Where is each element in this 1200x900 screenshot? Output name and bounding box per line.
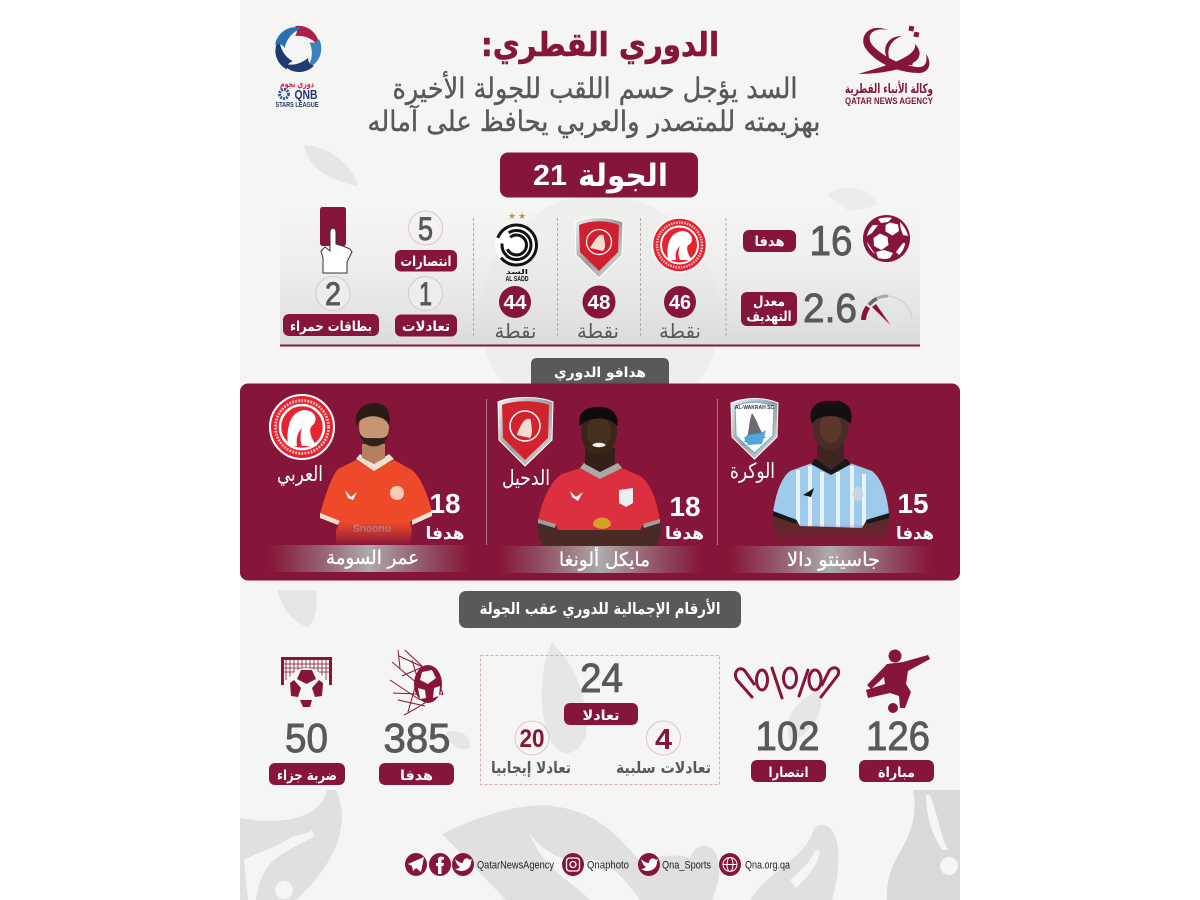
- icon: twitter: [638, 853, 660, 876]
- logo: Al Sadd: ★: [518, 211, 526, 221]
- stat: red cards 2: بطاقات حمراء: [290, 319, 372, 335]
- stat: goals 385: هدفا: [400, 768, 433, 784]
- round badge: 21: [533, 160, 567, 192]
- logo: QNB Stars League: [267, 22, 327, 109]
- logo: Al Sadd: السد: [506, 268, 528, 276]
- panel: league scorers: [240, 384, 960, 580]
- team: Al Sadd: نقطة: [494, 319, 536, 343]
- stat: wins 5: 5: [418, 211, 433, 247]
- footer social links: [405, 853, 791, 876]
- logo: Al Sadd: AL SADD: [506, 276, 528, 283]
- stat: draws 1: 1: [419, 276, 432, 312]
- team: Al Sadd: 44: [504, 292, 527, 314]
- player photo: [316, 403, 436, 546]
- stat: scoring draws: تعادلا إيجابيا: [491, 758, 571, 777]
- stat: goalless draws: تعادلات سلبية: [616, 758, 711, 777]
- scorer: Jacinto Dala: هدفا: [896, 524, 934, 544]
- stat: draws 1: تعادلات: [402, 319, 450, 335]
- icon: facebook: [429, 853, 451, 876]
- player photo: [768, 401, 892, 546]
- title: الدوري القطري:: [481, 25, 719, 65]
- team: Al Duhail: [575, 218, 623, 343]
- subtitle: [368, 70, 820, 138]
- icon: red card in hand: [320, 207, 352, 273]
- stat: goals 385: 385: [384, 715, 450, 761]
- subtitle: بهزيمته للمتصدر والعربي يحافظ على آماله: [368, 105, 820, 138]
- stat: scoring average 2.6: [741, 285, 857, 331]
- scorer: Michael Olunga: [498, 398, 704, 573]
- heading: overall league figures: الأرقام الإجمالية للدوري عقب الجولة: [480, 599, 720, 619]
- logo: Qatar News Agency: QATAR NEWS AGENCY: [845, 96, 933, 106]
- player photo: Snoonu: [353, 523, 391, 535]
- scorer: Omar Al Somah: 18: [430, 488, 460, 519]
- stat: penalties 50: 50: [285, 715, 328, 761]
- logo: Qatar News Agency: وكالة الأنباء القطرية: [845, 80, 933, 97]
- stat: matches 126: 126: [866, 713, 930, 759]
- footer social links: QatarNewsAgency: [477, 860, 554, 872]
- logo: Al Sadd: ★: [508, 211, 516, 221]
- logo: QNB Stars League: QNB: [294, 87, 318, 102]
- scorer: Omar Al Somah: عمر السومة: [326, 547, 419, 569]
- footer social links: Qna_Sports: [662, 860, 711, 872]
- panel: draws breakdown: 24: [580, 655, 623, 701]
- stat: goalless draws: [616, 721, 711, 777]
- stat: goals 16: 16: [810, 217, 852, 264]
- logo: Qatar News Agency: [845, 26, 933, 106]
- stat: goals 385: [379, 650, 454, 785]
- icon: ball in net: [390, 650, 443, 715]
- stat: penalties 50: [269, 657, 345, 785]
- heading: overall league figures: [459, 591, 741, 628]
- stat: wins 102: [735, 668, 839, 782]
- logo: Al Duhail: [575, 218, 623, 278]
- page background: [240, 0, 960, 900]
- team: Al Arabi: [652, 218, 706, 343]
- stat: goals 16: [743, 217, 852, 264]
- logo: Al Wakrah: [731, 398, 778, 459]
- title: [368, 25, 820, 138]
- scorer: Michael Olunga: هدفا: [665, 524, 704, 544]
- scorer: Jacinto Dala: الوكرة: [730, 459, 775, 483]
- logo: Al Sadd: [495, 211, 538, 283]
- logo: Al Arabi: [652, 218, 706, 272]
- logo: QNB Stars League: STARS LEAGUE: [276, 100, 318, 109]
- scorer: Omar Al Somah: هدفا: [426, 524, 464, 544]
- logo: Al Arabi: [270, 395, 334, 459]
- stat: red cards 2: 2: [325, 276, 341, 312]
- team: Al Duhail: نقطة: [577, 319, 619, 343]
- round badge: الجولة: [578, 158, 668, 194]
- stat: wins 5: انتصارات: [400, 254, 452, 270]
- stat: goalless draws: 4: [655, 724, 672, 756]
- scorer: Jacinto Dala: جاسينتو دالا: [787, 549, 880, 571]
- footer social links: Qnaphoto: [587, 860, 629, 872]
- icon: ball in goal: [281, 657, 332, 708]
- stat: red cards 2: [283, 276, 379, 336]
- logo: Al Duhail: [498, 398, 553, 466]
- scorer: Jacinto Dala: 15: [898, 488, 928, 519]
- stat: wins 102: انتصارا: [768, 765, 808, 781]
- stat: wins 5: [395, 211, 457, 272]
- icon: victory chain: [735, 668, 839, 698]
- heading: league scorers: [531, 358, 669, 384]
- scorer: Omar Al Somah: [268, 395, 470, 572]
- stat: scoring draws: [491, 721, 571, 777]
- scorer: Jacinto Dala: [729, 398, 934, 573]
- watermark ornaments: [240, 145, 960, 900]
- footer social links: Qna.org.qa: [745, 860, 791, 872]
- subtitle: السد يؤجل حسم اللقب للجولة الأخيرة: [392, 70, 798, 105]
- scorer: Michael Olunga: مايكل ألونغا: [559, 547, 650, 571]
- player photo: [538, 407, 661, 546]
- logo: Al Wakrah: AL-WAKRAH SC: [735, 405, 774, 411]
- icon: kicking player: [866, 650, 930, 714]
- icon: gauge: [864, 296, 912, 325]
- stat: matches 126: مباراة: [878, 765, 915, 781]
- icon: telegram: [405, 853, 427, 876]
- icon: twitter: [452, 853, 474, 876]
- logo: QNB Stars League: دوري نجوم: [280, 80, 314, 90]
- stat: goals 16: هدفا: [754, 234, 784, 250]
- team: Al Arabi: 46: [669, 292, 691, 314]
- round stats band: [280, 207, 920, 346]
- icon: website: [719, 853, 741, 876]
- panel: draws breakdown: تعادلا: [582, 708, 620, 724]
- stat: wins 102: 102: [756, 713, 820, 759]
- stat: scoring average 2.6: 2.6: [803, 285, 857, 331]
- team: Al Sadd: [494, 211, 538, 343]
- scorer: Michael Olunga: الدحيل: [502, 466, 550, 490]
- team: Al Arabi: نقطة: [659, 319, 701, 343]
- heading: league scorers: هدافو الدوري: [554, 365, 646, 382]
- round badge: [500, 152, 698, 198]
- stat: draws 1: [395, 276, 457, 336]
- scorer: Michael Olunga: 18: [670, 491, 700, 522]
- icon: instagram: [562, 853, 584, 876]
- team: Al Duhail: 48: [588, 292, 610, 314]
- panel: draws breakdown: [480, 655, 720, 784]
- stat: penalties 50: ضربة جزاء: [277, 768, 337, 784]
- icon: football: [863, 215, 910, 262]
- stat: scoring draws: 20: [520, 725, 544, 753]
- stat: matches 126: [859, 650, 934, 782]
- stat: scoring average 2.6: التهديف: [746, 309, 792, 325]
- scorer: Omar Al Somah: العربي: [277, 462, 323, 486]
- stat: scoring average 2.6: معدل: [753, 294, 785, 310]
